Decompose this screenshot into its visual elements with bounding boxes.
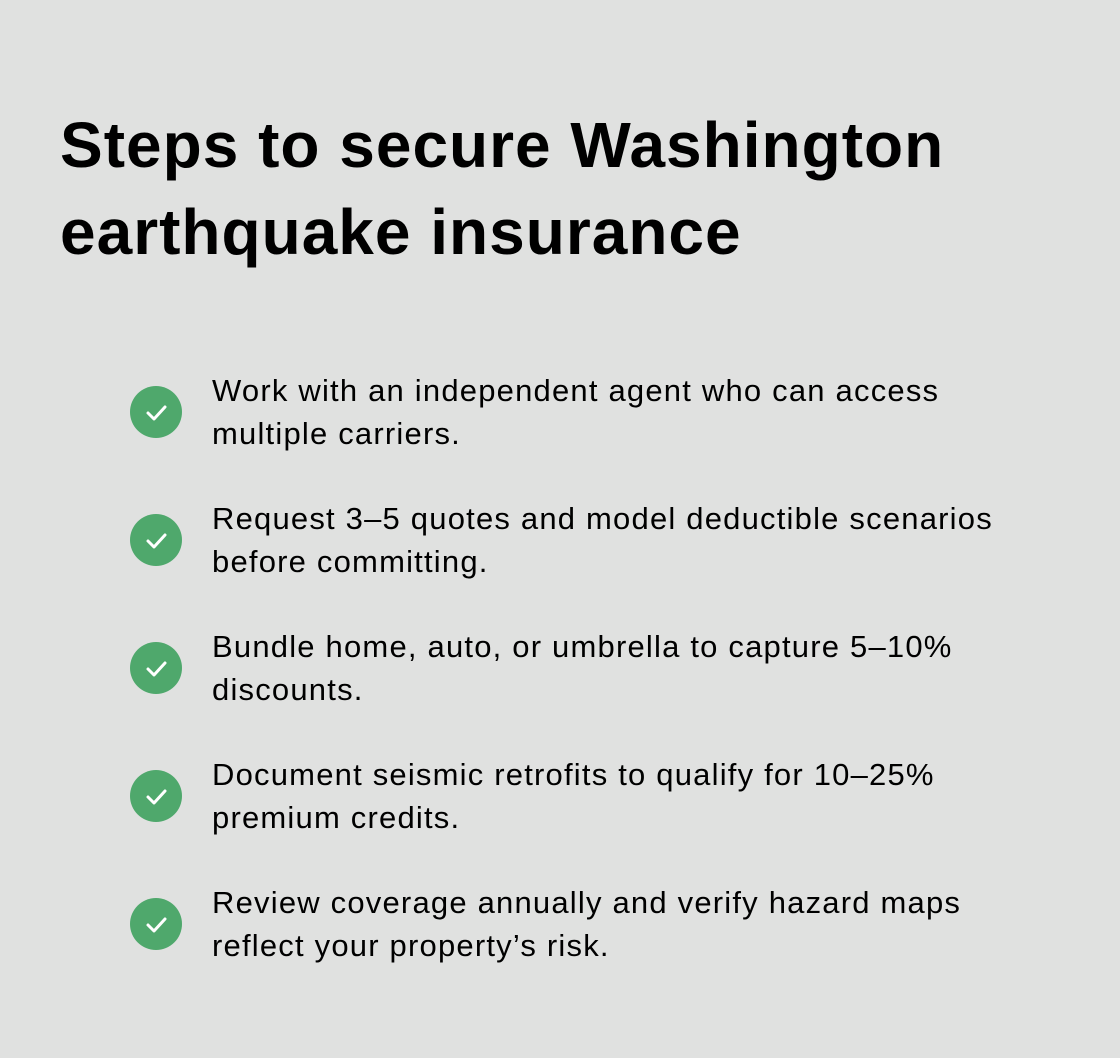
icon: check bbox=[130, 386, 182, 438]
item 3 bbox=[130, 629, 953, 707]
title: Steps to secure Washington bbox=[60, 109, 944, 181]
title bbox=[60, 109, 944, 268]
item 5 bbox=[130, 885, 961, 963]
text: multiple carriers. bbox=[212, 416, 461, 451]
icon: check bbox=[130, 642, 182, 694]
title: earthquake insurance bbox=[60, 196, 742, 268]
icon: check bbox=[130, 514, 182, 566]
text bbox=[212, 373, 939, 451]
item 1 bbox=[130, 373, 939, 451]
text: before committing. bbox=[212, 544, 489, 579]
text: Document seismic retrofits to qualify for 10–25% bbox=[212, 757, 935, 792]
text bbox=[212, 501, 993, 579]
text bbox=[212, 885, 961, 963]
icon: check bbox=[130, 898, 182, 950]
item 4 bbox=[130, 757, 935, 835]
text bbox=[212, 757, 935, 835]
icon: check bbox=[130, 770, 182, 822]
text: discounts. bbox=[212, 672, 364, 707]
text: Request 3–5 quotes and model deductible scenarios bbox=[212, 501, 993, 536]
item 2 bbox=[130, 501, 993, 579]
text: reflect your property’s risk. bbox=[212, 928, 610, 963]
text bbox=[212, 629, 953, 707]
text: Bundle home, auto, or umbrella to capture 5–10% bbox=[212, 629, 953, 664]
text: Work with an independent agent who can access bbox=[212, 373, 939, 408]
text: Review coverage annually and verify hazard maps bbox=[212, 885, 961, 920]
text: premium credits. bbox=[212, 800, 460, 835]
